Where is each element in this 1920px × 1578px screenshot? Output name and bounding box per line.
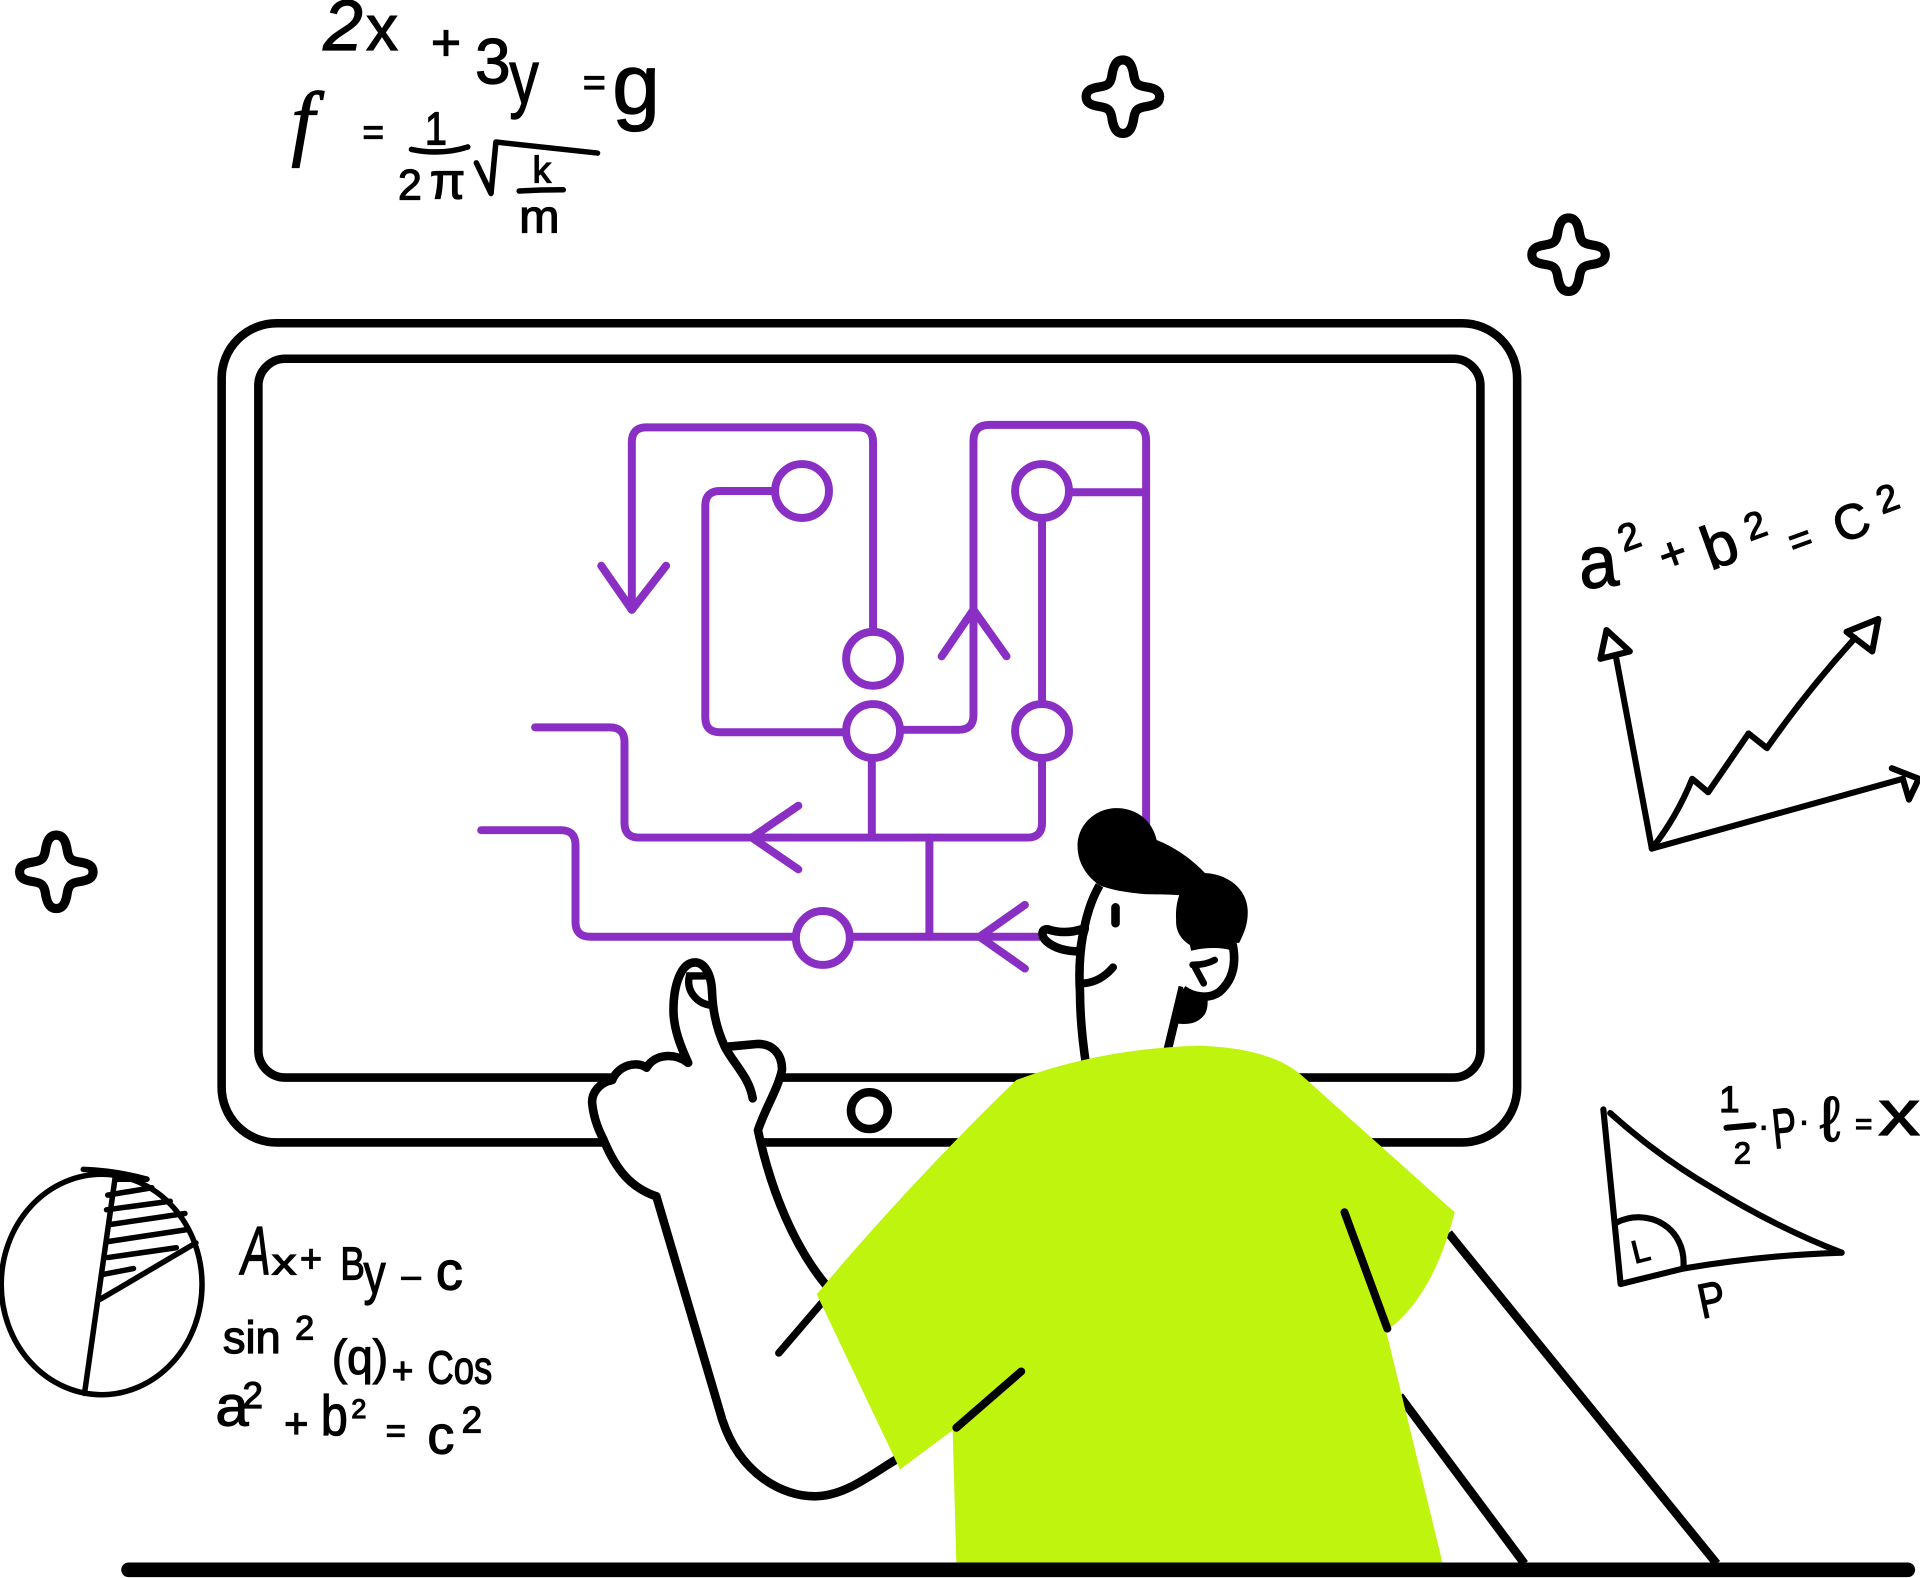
math formulas: top [291, 0, 660, 243]
person: head [1042, 808, 1248, 1065]
floor line [129, 1564, 1908, 1576]
math formulas: bottom left: = [386, 1412, 406, 1450]
math formulas: bottom left: sin [223, 1312, 281, 1363]
tablet device [222, 323, 1517, 1142]
math formulas: bottom left: + [392, 1351, 413, 1392]
icon: sparkle star right [1532, 218, 1605, 291]
math formulas: bottom left: x [272, 1242, 296, 1283]
person: back arm and chair lines [1400, 1233, 1717, 1564]
math formulas: bottom left: b [321, 1384, 348, 1447]
math formulas: bottom left: c [436, 1241, 463, 1301]
math formulas: bottom left: – [402, 1257, 422, 1295]
math formulas: bottom left: A [239, 1213, 271, 1290]
math formulas: bottom left: Cos [427, 1342, 492, 1394]
triangle sketch with formula: P [1693, 1271, 1731, 1330]
triangle sketch with formula: · [1799, 1102, 1809, 1138]
math formula: a squared plus b squared, right: 2 [1612, 514, 1647, 561]
triangle sketch with formula: x [1878, 1078, 1920, 1149]
math formulas: bottom left: 2 [242, 1375, 263, 1416]
triangle sketch with formula [1603, 1078, 1920, 1330]
math formulas: bottom left: (q) [332, 1331, 388, 1385]
math formulas: top: = [362, 111, 384, 152]
math formulas: top: 3 [475, 26, 511, 97]
math formulas: bottom left: c [427, 1405, 454, 1465]
math formulas: top: + [431, 13, 461, 71]
math formulas: top: m [519, 191, 560, 243]
math formulas: top: f [291, 76, 324, 168]
triangle sketch with formula: L [1628, 1231, 1654, 1270]
math formulas: bottom left: + [300, 1238, 322, 1281]
math formulas: bottom left: y [364, 1242, 386, 1305]
math formula: a squared plus b squared, right: 2 [1871, 476, 1905, 523]
line chart sketch with arrows [1600, 619, 1919, 849]
math formulas: bottom left: a [216, 1374, 249, 1437]
math formulas: top: g [612, 37, 660, 133]
triangle sketch with formula: · [1758, 1107, 1769, 1143]
math formulas: bottom left: 2 [462, 1400, 482, 1441]
person: pointing hand and forearm [592, 962, 931, 1496]
math formulas: bottom left: B [340, 1238, 365, 1290]
triangle sketch with formula: = [1855, 1108, 1872, 1141]
triangle sketch with formula: 2 [1734, 1136, 1751, 1170]
math formula: a squared plus b squared, right: 2 [1739, 503, 1773, 550]
math formulas: bottom left: + [284, 1400, 308, 1447]
icon: sparkle star top [1086, 60, 1160, 133]
math formula: a squared plus b squared, right: a [1574, 518, 1622, 605]
icon: sparkle star left [20, 835, 93, 909]
math formula: a squared plus b squared, right: = [1782, 516, 1818, 564]
math formula: a squared plus b squared, right: C [1826, 491, 1877, 554]
math formula: a squared plus b squared, right: b [1692, 507, 1747, 583]
triangle sketch with formula: ℓ [1820, 1084, 1840, 1155]
triangle sketch with formula: 1 [1719, 1079, 1740, 1120]
math formulas: top: y [509, 35, 539, 120]
triangle sketch with formula: P [1769, 1095, 1800, 1161]
circuit diagram on tablet screen [481, 425, 1146, 969]
math formulas: top: k [533, 149, 552, 190]
math formulas: bottom left: 2 [295, 1310, 314, 1348]
math formulas: top: 1 [425, 102, 447, 154]
math formulas: bottom left: 2 [351, 1394, 366, 1424]
math formulas: top: = [583, 62, 606, 105]
math formulas: top: 2 [398, 162, 422, 210]
person: lime green t-shirt [817, 1046, 1455, 1562]
math formulas: top: π [430, 151, 465, 209]
pie chart sketch [1, 1169, 202, 1395]
math formula: a squared plus b squared, right: + [1651, 524, 1694, 582]
math formula: a squared plus b squared, right [1574, 476, 1905, 605]
math formulas: bottom left [216, 1213, 492, 1465]
